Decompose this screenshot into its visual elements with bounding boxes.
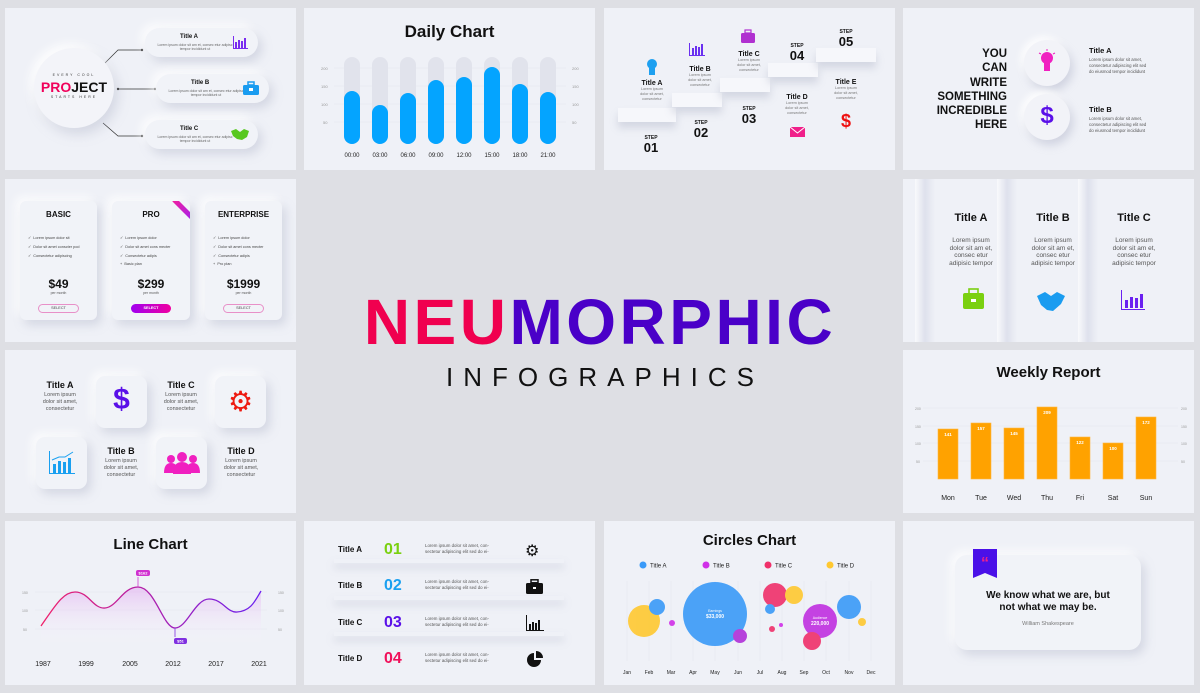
bar chart: 200 <box>321 66 328 71</box>
panel: steps: Lorem ipsum <box>786 101 808 105</box>
panel: steps: Title B <box>689 66 711 73</box>
line chart <box>22 570 284 668</box>
column: Title A: consec etur <box>954 252 988 259</box>
column: Title C: Title C <box>1117 212 1151 224</box>
text: Title D: Title D <box>227 446 255 456</box>
panel: numbered list <box>304 521 595 685</box>
bubble chart: Title B <box>713 564 730 570</box>
line chart: 1999 <box>78 661 94 668</box>
icon box: people <box>156 437 207 489</box>
center circle: STARTS HERE <box>51 95 97 99</box>
card: basic: SELECT <box>51 306 66 310</box>
text: Title B: Lorem ipsum dolor sit amet, <box>1089 116 1142 121</box>
card: enterprise: ✓ Lorem ipsum dolor <box>213 236 250 240</box>
line chart: 2005 <box>122 661 138 668</box>
text: Title B: consectetur <box>107 472 135 478</box>
column: Title A: Title A <box>954 212 988 224</box>
icon box: gear: ⚙ <box>228 386 253 417</box>
text: Title B: Lorem ipsum <box>105 458 137 464</box>
title: Weekly Report <box>997 364 1100 381</box>
card: basic: BASIC <box>46 210 71 219</box>
card: basic: per month <box>51 291 66 295</box>
line chart: 2017 <box>208 661 224 668</box>
bubble chart: Jun <box>734 670 742 676</box>
panel: steps: STEP <box>742 106 756 112</box>
text: Title A: consectetur <box>46 406 74 412</box>
icon: dollar <box>1024 94 1070 140</box>
row: Title D <box>338 650 543 667</box>
text: Title A <box>1089 46 1146 74</box>
panel: icon grid <box>5 350 296 513</box>
panel: steps: 03 <box>742 111 756 126</box>
text: Title D <box>224 446 258 478</box>
row: Title C: sectetur adipiscing elit sed do ei- <box>425 622 489 627</box>
bar chart: Fri <box>1076 495 1085 502</box>
bubble chart: Title A <box>650 564 666 570</box>
bar chart: 100 <box>1109 446 1117 451</box>
bubble chart: Dec <box>867 670 876 676</box>
icon: dollar: $ <box>1040 102 1054 129</box>
panel: steps: Title E <box>836 79 856 86</box>
panel: steps: Title C <box>738 51 760 58</box>
row: Title D: Lorem ipsum dolor sit amet, con- <box>425 652 489 657</box>
bar chart: 150 <box>915 425 921 429</box>
row: Title B <box>338 577 543 594</box>
bar chart: Mon <box>941 495 955 502</box>
card: enterprise: per month <box>236 291 251 295</box>
subtitle: INFOGRAPHICS: INFOGRAPHICS <box>446 362 764 392</box>
line chart: 150 <box>22 591 28 595</box>
card: enterprise <box>205 201 282 320</box>
text: quote <box>986 590 1110 613</box>
column: Title C: consec etur <box>1117 252 1151 259</box>
line chart: 1987 <box>35 661 51 668</box>
text: Title C: Title C <box>167 380 195 390</box>
panel: steps: consectetur <box>787 111 807 115</box>
panel: steps: dolor sit amet, <box>785 106 809 110</box>
column: Title B: Lorem ipsum <box>1034 237 1072 244</box>
panel: pricing <box>5 179 296 342</box>
bar chart: Wed <box>1007 495 1021 502</box>
text: Title A: Lorem ipsum <box>44 392 76 398</box>
column: Title A: Lorem ipsum <box>952 237 990 244</box>
text: author: William Shakespeare <box>1022 621 1074 627</box>
text: Title D: consectetur <box>227 472 255 478</box>
column: Title C: Lorem ipsum <box>1115 237 1153 244</box>
bar chart: 50 <box>572 120 577 125</box>
panel: you can write <box>903 8 1194 170</box>
bubble chart: Earnings <box>708 609 722 613</box>
bar chart: 12:00 <box>456 153 472 159</box>
panel: weekly report <box>903 350 1194 513</box>
bubble chart: Title C <box>775 564 793 570</box>
card: pro: ✓ Lorem ipsum dolor <box>120 236 157 240</box>
bar chart: Thu <box>1041 495 1053 502</box>
panel: steps <box>604 8 895 170</box>
column: Title A: dolor sit am et, <box>950 245 992 252</box>
text: Title A: Title A <box>1089 46 1112 55</box>
column: Title B: Title B <box>1036 212 1070 224</box>
step titles: Lorem ipsum <box>641 87 663 91</box>
row: Title A: Lorem ipsum dolor sit amet, con- <box>425 543 489 548</box>
panel: project <box>5 8 296 170</box>
panel: steps: dolor sit amet, <box>737 63 761 67</box>
line chart: 2021 <box>251 661 267 668</box>
row shadows <box>334 559 564 563</box>
row: Title A: ⚙ <box>525 543 539 560</box>
headline text <box>937 48 1007 131</box>
bar chart <box>915 406 1187 502</box>
text: Title D: dolor sit amet, <box>224 465 258 471</box>
headline text: HERE <box>975 119 1007 131</box>
bar chart: 15:00 <box>484 153 500 159</box>
row: Title A: sectetur adipiscing elit sed do ei- <box>425 549 489 554</box>
bar chart: 100 <box>915 442 921 446</box>
bar chart: 122 <box>1076 440 1084 445</box>
title: Daily Chart <box>405 22 494 41</box>
pill: Title A: Title A <box>180 34 198 40</box>
panel: steps: Lorem ipsum <box>689 73 711 77</box>
bar chart: 100 <box>1181 442 1187 446</box>
bubble chart: Aug <box>778 670 787 676</box>
row: Title C: Title C <box>338 618 362 627</box>
pill: Title B: Lorem ipsum dolor sit am et, consec etur adipisc tempor incididunt ut <box>168 89 244 97</box>
text: Title A: Lorem ipsum dolor sit amet, <box>1089 57 1142 62</box>
card: pro: PRO <box>142 210 160 219</box>
icon box: chart <box>36 437 87 489</box>
icon box: gear <box>215 376 266 428</box>
card: basic <box>20 201 97 320</box>
icon box: dollar <box>96 376 147 428</box>
bar chart: 150 <box>572 84 579 89</box>
text: Title B: Title B <box>1089 105 1112 114</box>
bar chart: 145 <box>1010 431 1018 436</box>
text: Title A: Title A <box>46 380 74 390</box>
icon box: dollar: $ <box>113 383 130 416</box>
text: Title C: Lorem ipsum <box>165 392 197 398</box>
line chart: 100 <box>22 609 28 613</box>
panel: steps: 05 <box>839 34 853 49</box>
card: pro <box>112 201 190 320</box>
card: pro: ✓ Dolor sit amet cons mecter <box>120 245 170 249</box>
text: Title D: Lorem ipsum <box>225 458 257 464</box>
text: Title B: do eiusmod tempor incididunt <box>1089 128 1145 133</box>
bubble chart: Audience <box>813 616 827 620</box>
row: Title B: Lorem ipsum dolor sit amet, con- <box>425 579 489 584</box>
center circle: PROJECT <box>41 79 107 95</box>
line chart: 2012 <box>165 661 181 668</box>
row: Title B: Title B <box>338 581 362 590</box>
bar chart: Sat <box>1108 495 1118 502</box>
column: Title B: dolor sit am et, <box>1032 245 1074 252</box>
card: pro: ✓ Consectetur adipis <box>120 254 157 258</box>
bar chart: 00:00 <box>344 153 360 159</box>
panel: steps: 02 <box>694 125 708 140</box>
icons <box>963 288 1145 311</box>
text: Title C <box>164 380 198 412</box>
step shelves <box>618 108 676 122</box>
bar chart: 06:00 <box>400 153 416 159</box>
panel: steps: STEP <box>839 29 853 35</box>
title: Circles Chart <box>703 532 796 549</box>
line chart: 50 <box>23 628 27 632</box>
bubble chart: Sep <box>800 670 809 676</box>
column: Title C <box>1112 212 1156 267</box>
pill: Title C <box>145 120 258 149</box>
line chart: $51 <box>177 638 185 644</box>
panel: steps: Lorem ipsum <box>738 58 760 62</box>
icons <box>647 29 851 137</box>
column shading <box>915 179 935 342</box>
text: Title A: consectetur adipiscing elit sed <box>1089 63 1146 68</box>
icons: $ <box>841 111 851 131</box>
step labels: STEP <box>644 135 658 141</box>
bar chart: 09:00 <box>428 153 444 159</box>
bubble chart: May <box>710 670 720 676</box>
row: Title C: Lorem ipsum dolor sit amet, con- <box>425 616 489 621</box>
column: Title B <box>1031 212 1075 267</box>
bar chart: 150 <box>321 84 328 89</box>
panel: three columns <box>903 179 1194 342</box>
headline text: INCREDIBLE <box>937 105 1007 117</box>
bubble chart: Title D <box>837 564 855 570</box>
panel: line chart <box>5 521 296 685</box>
icon: bookmark quote <box>973 549 997 578</box>
text: quote: not what we may be. <box>999 602 1097 613</box>
pill: Title A <box>145 28 258 57</box>
bubble chart <box>623 562 876 676</box>
text: Title A: do eiusmod tempor incididunt <box>1089 69 1145 74</box>
card: pro: $299 <box>138 277 164 291</box>
text: Title B: Title B <box>107 446 135 456</box>
headline text: YOU <box>982 48 1007 60</box>
pill: Title B: Title B <box>191 80 209 86</box>
panel: steps: dolor sit amet, <box>834 91 858 95</box>
line chart: 50 <box>278 628 282 632</box>
bar chart: 03:00 <box>372 153 388 159</box>
bar chart: 209 <box>1043 410 1051 415</box>
row: Title D: sectetur adipiscing elit sed do ei- <box>425 658 489 663</box>
bar chart: 18:00 <box>512 153 528 159</box>
panel: steps: STEP <box>694 120 708 126</box>
card: basic: $49 <box>48 277 69 291</box>
quote card <box>955 555 1141 650</box>
card: enterprise: SELECT <box>236 306 251 310</box>
bar chart: 50 <box>916 460 920 464</box>
bubble chart: Oct <box>822 670 830 676</box>
panel: steps: STEP <box>790 43 804 49</box>
bubble chart: Nov <box>845 670 854 676</box>
headline text: WRITE <box>970 77 1007 89</box>
center circle: EVERY COOL <box>53 73 95 77</box>
text: quote: We know what we are, but <box>986 590 1110 601</box>
text: Title B: consectetur adipiscing elit sed <box>1089 122 1146 127</box>
bar chart: 200 <box>572 66 579 71</box>
bar chart: 150 <box>1181 425 1187 429</box>
text: Title A: dolor sit amet, <box>43 399 77 405</box>
title: NEUMORPHIC: NEUMORPHIC <box>364 286 836 358</box>
panel: steps: Title D <box>786 94 808 101</box>
row: Title B: sectetur adipiscing elit sed do ei- <box>425 585 489 590</box>
title: Line Chart <box>113 536 188 553</box>
row: Title A <box>338 541 539 560</box>
text: Title B <box>104 446 138 478</box>
step labels: 01 <box>644 140 658 155</box>
column: Title A: adipisic tempor <box>949 260 993 267</box>
bubble chart: Jan <box>623 670 631 676</box>
bar chart <box>321 57 579 159</box>
headline text: CAN <box>982 62 1007 74</box>
bubble chart: Jul <box>757 670 763 676</box>
bubble chart: $33,000 <box>706 614 724 620</box>
panel: daily chart <box>304 8 595 170</box>
step titles <box>640 80 664 101</box>
text: Title B <box>1089 105 1146 133</box>
bubble chart: Apr <box>689 670 697 676</box>
row: Title A: Title A <box>338 545 362 554</box>
card: enterprise: ENTERPRISE <box>218 210 269 219</box>
bar chart: 100 <box>321 102 328 107</box>
panel: circles chart <box>604 521 895 685</box>
line chart: 100 <box>278 609 284 613</box>
headline text: SOMETHING <box>937 91 1007 103</box>
pill: Title B <box>156 74 269 103</box>
card: pro: + Basic plan <box>120 262 142 266</box>
panel: steps: 04 <box>790 48 804 63</box>
text: Title B: dolor sit amet, <box>104 465 138 471</box>
panel: steps: consectetur <box>739 68 759 72</box>
bar chart: 50 <box>1181 460 1185 464</box>
bubble chart: Mar <box>667 670 676 676</box>
bar chart: 100 <box>572 102 579 107</box>
icon: bookmark quote: “ <box>981 555 989 572</box>
panel: quote <box>903 521 1194 685</box>
card: pro: SELECT <box>144 306 158 310</box>
card: pro: per month <box>143 291 159 295</box>
bubble chart: 220,000 <box>811 621 829 627</box>
bar chart: 141 <box>944 432 952 437</box>
card: basic: ✓ Consectetur adipiscing <box>28 254 72 258</box>
text: Title C: consectetur <box>167 406 195 412</box>
card: basic: ✓ Dolor sit amet conscter pod <box>28 245 80 249</box>
column: Title A <box>949 212 993 267</box>
bar chart: 200 <box>1181 407 1187 411</box>
row: Title C <box>338 614 544 631</box>
step titles: consectetur <box>642 97 662 101</box>
line chart: 150 <box>278 591 284 595</box>
card: enterprise: ✓ Dolor sit amet cons mecter <box>213 245 263 249</box>
step titles: dolor sit amet, <box>640 92 664 96</box>
text: Title A <box>43 380 77 412</box>
bar chart: 50 <box>323 120 328 125</box>
card: enterprise: $1999 <box>227 277 260 291</box>
row: Title B: 02 <box>384 577 402 594</box>
center circle <box>34 48 114 128</box>
bar chart: Sun <box>1140 495 1152 502</box>
column: Title C: dolor sit am et, <box>1113 245 1155 252</box>
bar chart: 157 <box>977 426 985 431</box>
bar chart: 21:00 <box>540 153 556 159</box>
card: enterprise: ✓ Consectetur adipis <box>213 254 250 258</box>
line chart: $162 <box>139 570 148 576</box>
icon: bulb <box>1024 40 1070 86</box>
card: enterprise: + Pro plan <box>213 262 231 266</box>
pill: Title C: Lorem ipsum dolor sit am et, consec etur adipisc tempor incididunt ut <box>157 135 233 143</box>
column: Title B: adipisic tempor <box>1031 260 1075 267</box>
panel: steps: Lorem ipsum <box>835 86 857 90</box>
bar chart: 172 <box>1142 420 1150 425</box>
bar chart: Tue <box>975 495 987 502</box>
pill: Title C: Title C <box>180 126 198 132</box>
bubble chart: Feb <box>645 670 654 676</box>
row: Title A: 01 <box>384 541 402 558</box>
text: Title C: dolor sit amet, <box>164 399 198 405</box>
bar chart: 200 <box>915 407 921 411</box>
step titles: Title A <box>641 80 662 87</box>
column: Title B: consec etur <box>1036 252 1070 259</box>
pill: Title A: Lorem ipsum dolor sit am et, consec etur adipisc tempor incididunt ut <box>157 43 233 51</box>
panel: steps: consectetur <box>690 83 710 87</box>
panel: steps: consectetur <box>836 96 856 100</box>
connector lines <box>102 48 156 138</box>
column: Title C: adipisic tempor <box>1112 260 1156 267</box>
card: basic: ✓ Lorem ipsum dolor sit <box>28 236 70 240</box>
row: Title C: 03 <box>384 614 402 631</box>
row: Title D: 04 <box>384 650 402 667</box>
panel: steps: dolor sit amet, <box>688 78 712 82</box>
row: Title D: Title D <box>338 654 362 663</box>
